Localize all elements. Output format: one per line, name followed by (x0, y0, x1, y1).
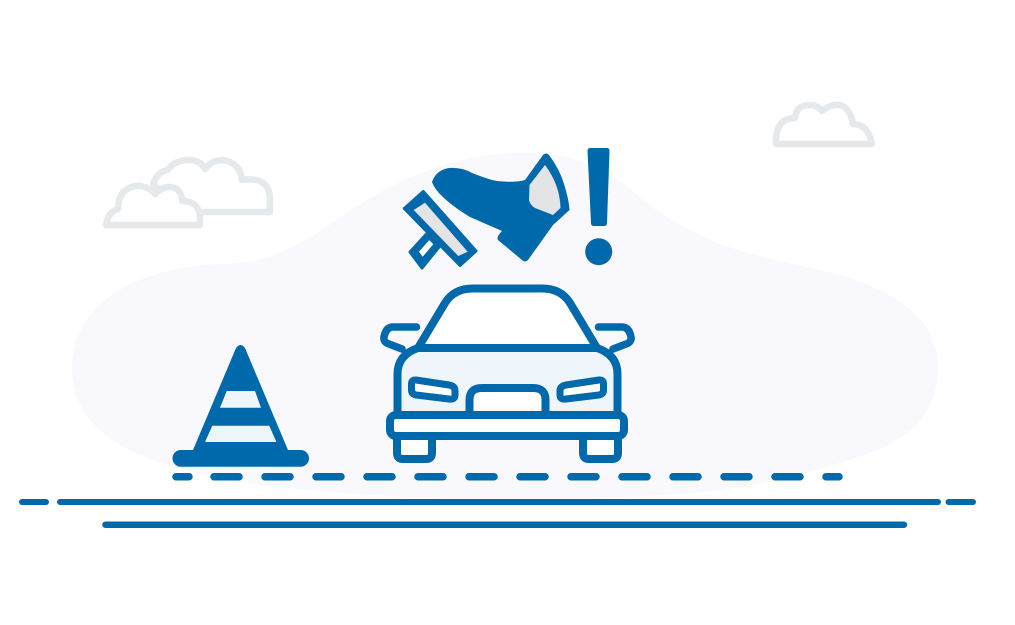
cloud: right (776, 105, 872, 144)
shoe sole (529, 165, 560, 215)
cloud: front left (106, 186, 200, 225)
shoe (432, 154, 570, 262)
cloud: back left (153, 160, 270, 212)
pedal handle inset (419, 240, 433, 257)
car bumper (390, 415, 624, 436)
car mirrors (384, 327, 631, 349)
car wheels (397, 436, 432, 459)
car body (398, 348, 618, 415)
car windshield (418, 288, 597, 348)
road lines (22, 502, 973, 525)
pedal plate inset (414, 203, 468, 256)
icon: traffic cone (172, 345, 309, 467)
pedal plate (404, 192, 476, 266)
icon: exclamation mark (585, 148, 612, 265)
pedal handle (410, 234, 439, 268)
car headlights (412, 380, 455, 399)
car grille (470, 388, 546, 415)
background blob (72, 153, 938, 498)
icon: foot pressing pedal (404, 154, 570, 268)
pedal (404, 192, 476, 268)
road dashes (176, 473, 839, 480)
icon: car (384, 288, 631, 459)
